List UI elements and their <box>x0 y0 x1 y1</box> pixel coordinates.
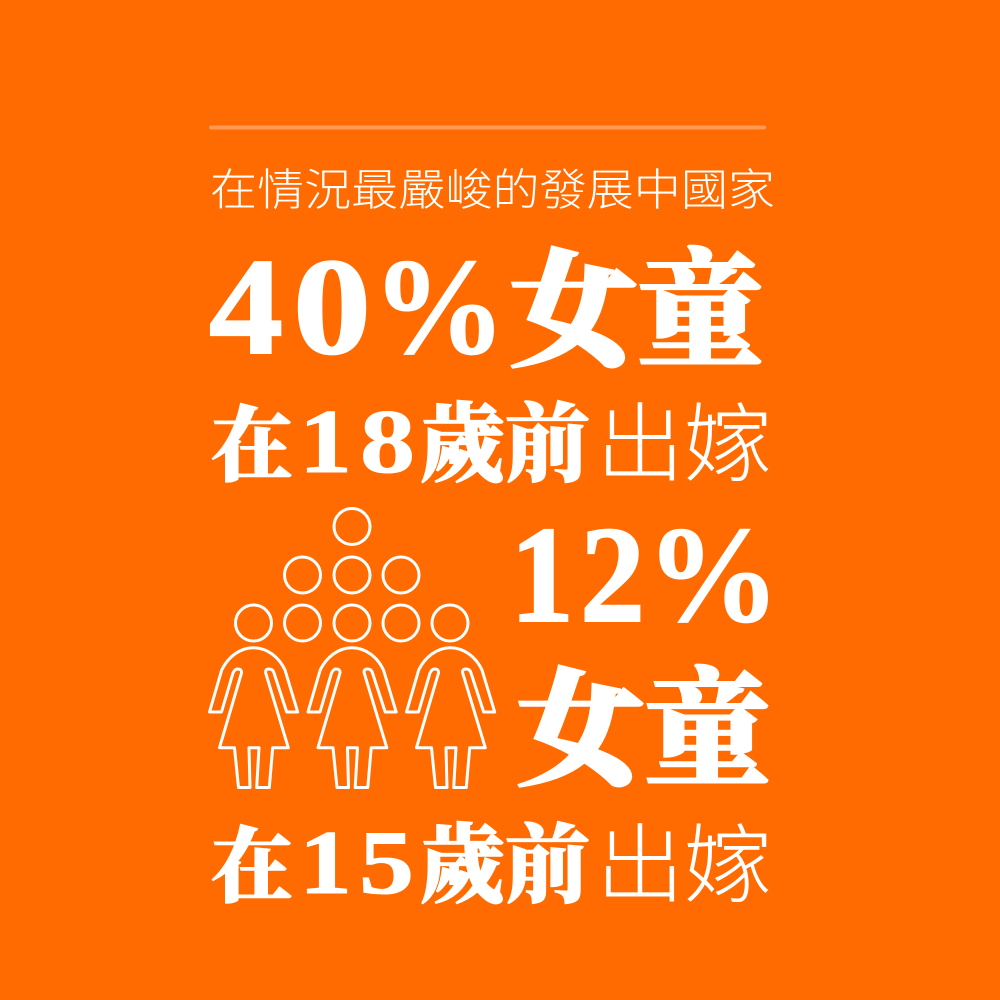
statement: married before 15: 歲前 <box>420 796 590 920</box>
statement: married before 15 <box>211 796 772 920</box>
headline: 12%: 1 <box>510 498 574 651</box>
icon: heads <box>236 508 468 641</box>
statement: married before 18: 在 <box>211 381 293 498</box>
headline: 40% girls: % <box>372 230 506 383</box>
icon: three woman figures <box>210 648 495 788</box>
statement: married before 18: 1 <box>299 391 352 492</box>
headline: 12%: % <box>646 498 780 651</box>
statement: married before 15: 出嫁 <box>596 818 772 914</box>
headline: 40% girls: 女童 <box>507 209 765 393</box>
statement: married before 18: 歲前 <box>420 375 590 499</box>
statement: married before 18 <box>211 375 772 499</box>
headline: 40% girls <box>209 209 765 393</box>
statement: married before 15: 1 <box>299 812 352 913</box>
intro text: 在情況最嚴峻的發展中國家 <box>210 166 775 215</box>
headline: 12%: 2 <box>580 498 645 651</box>
headline: 40% girls: 4 <box>209 230 283 383</box>
statement: married before 18: 8 <box>360 391 415 492</box>
headline: girls: 女童 <box>514 628 772 812</box>
icon: group of three women and heads <box>210 508 495 788</box>
headline: 12% <box>510 498 780 651</box>
statement: married before 15: 5 <box>359 812 414 913</box>
statement: married before 18: 出嫁 <box>596 397 772 493</box>
statement: married before 15: 在 <box>211 802 293 919</box>
headline: 40% girls: 0 <box>293 230 371 383</box>
